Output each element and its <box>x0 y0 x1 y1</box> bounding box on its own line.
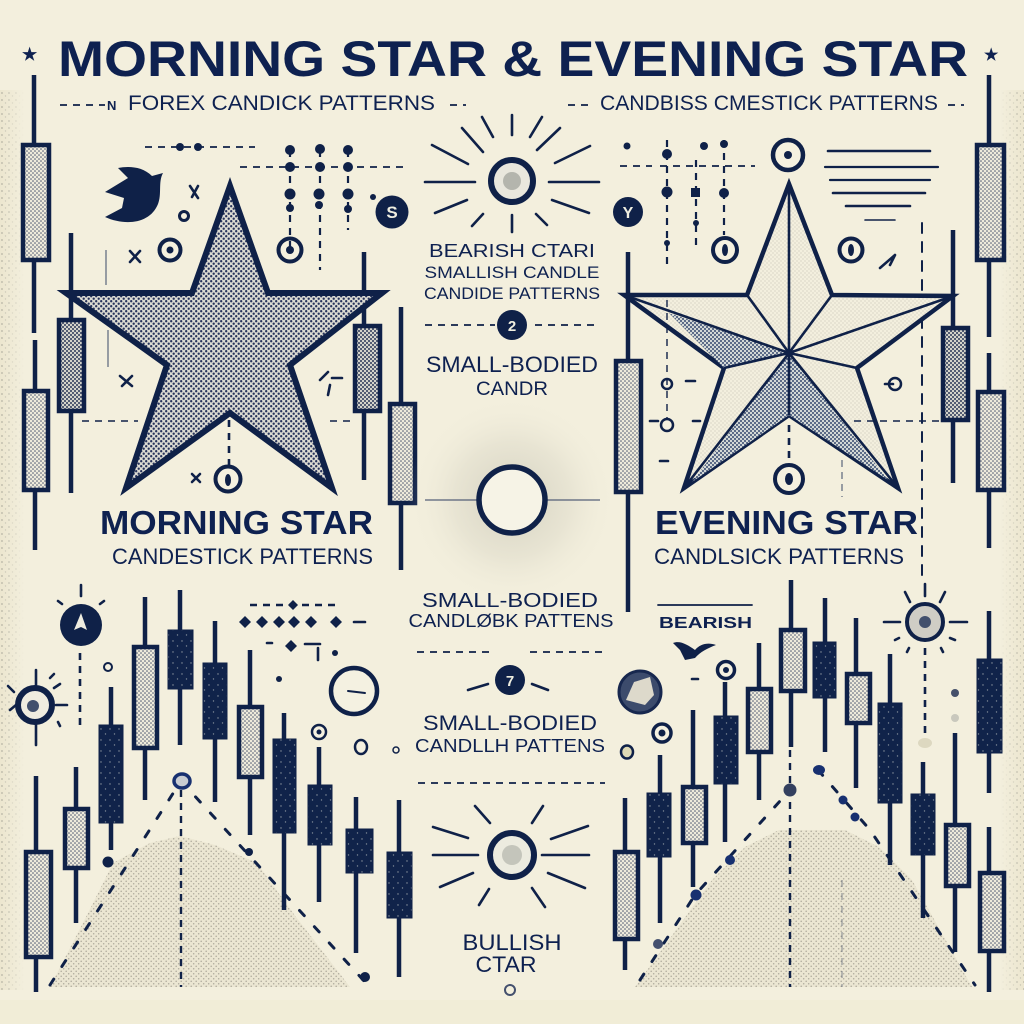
divider with dark badge: 7 <box>506 673 514 690</box>
morning star <box>66 186 382 488</box>
center label: bullish star <box>462 930 562 977</box>
sun: top center <box>425 115 599 232</box>
center label: bearish star: CANDIDE PATTERNS <box>424 284 600 303</box>
evening star label: CANDLSICK PATTERNS <box>654 544 904 569</box>
center circle <box>407 395 617 605</box>
icon: Y badge: Y <box>623 205 634 222</box>
center label: small-bodied: SMALL-BODIED <box>426 352 598 377</box>
sun: right <box>884 584 967 748</box>
center label: bullish star: CTAR <box>476 952 536 977</box>
subtitle left: FOREX CANDICK PATTERNS <box>128 92 435 115</box>
evening star label: EVENING STAR <box>655 504 918 541</box>
evening star label <box>654 504 918 569</box>
icon: bird <box>105 167 163 222</box>
icon: dark portrait badge <box>619 671 661 713</box>
candles: top right <box>616 75 1004 612</box>
icons: bottom left-centre diamonds <box>239 600 365 660</box>
triangle: left <box>50 836 350 987</box>
icons: small circles bottom left <box>104 650 399 754</box>
trend lines: right <box>640 750 975 987</box>
evening star <box>624 184 953 488</box>
icons: small rings bottom right <box>621 662 734 758</box>
divider with badge <box>425 310 600 340</box>
center label: bullish star: BULLISH <box>462 930 562 955</box>
center label: small-bodied patterns 2: SMALL-BODIED <box>423 712 597 735</box>
icon: ring clock <box>331 668 377 714</box>
center label: small-bodied <box>426 352 598 400</box>
morning star label <box>100 504 373 569</box>
subtitle right: CANDBISS CMESTICK PATTERNS <box>600 92 938 115</box>
morning star label: CANDESTICK PATTERNS <box>112 544 373 569</box>
dotted grid: right <box>620 140 755 265</box>
icon: small ring bottom <box>505 985 515 995</box>
icon: Y badge <box>613 197 643 227</box>
center label: bearish star: BEARISH CTARI <box>429 241 595 261</box>
trend lines: left <box>50 774 370 987</box>
candles: bottom left <box>26 590 412 992</box>
icons: bottom left sun <box>8 670 67 745</box>
label: bearish right <box>658 605 752 660</box>
divider with badge: 2 <box>508 318 516 335</box>
morning star label: MORNING STAR <box>100 504 373 541</box>
triangle: right <box>635 830 972 987</box>
dotted grid: left <box>145 143 405 270</box>
divider dashed <box>418 782 605 784</box>
center label: small-bodied: CANDR <box>476 379 548 400</box>
icon: small star left: ★ <box>22 45 38 64</box>
small icons: left star area <box>82 186 352 492</box>
center label: small-bodied patterns 1: SMALL-BODIED <box>422 590 598 612</box>
center label: bearish star: SMALLISH CANDLE <box>424 263 600 282</box>
candles: top left <box>23 75 415 570</box>
center label: small-bodied patterns 2: CANDLLH PATTENS <box>415 736 605 756</box>
center label: small-bodied patterns 1 <box>408 590 614 631</box>
icon: horizontal lines <box>825 151 938 220</box>
small icons: right star area <box>650 140 950 497</box>
candles: bottom right <box>615 580 1004 992</box>
title: MORNING STAR & EVENING STAR <box>58 31 968 87</box>
icon: S badge <box>376 196 408 228</box>
label: bearish right: BEARISH <box>659 615 752 632</box>
center label: bearish star <box>424 241 600 303</box>
icon: S badge: S <box>386 203 398 222</box>
icon: dark arrow badge <box>58 585 104 730</box>
icon: small star right: ★ <box>984 47 999 64</box>
center label: small-bodied patterns 1: CANDLØBK PATTENS <box>408 611 614 631</box>
subtitle left: N <box>107 98 116 113</box>
sun: bottom center <box>433 806 589 907</box>
center label: small-bodied patterns 2 <box>415 712 605 756</box>
divider with dark badge <box>417 652 607 695</box>
